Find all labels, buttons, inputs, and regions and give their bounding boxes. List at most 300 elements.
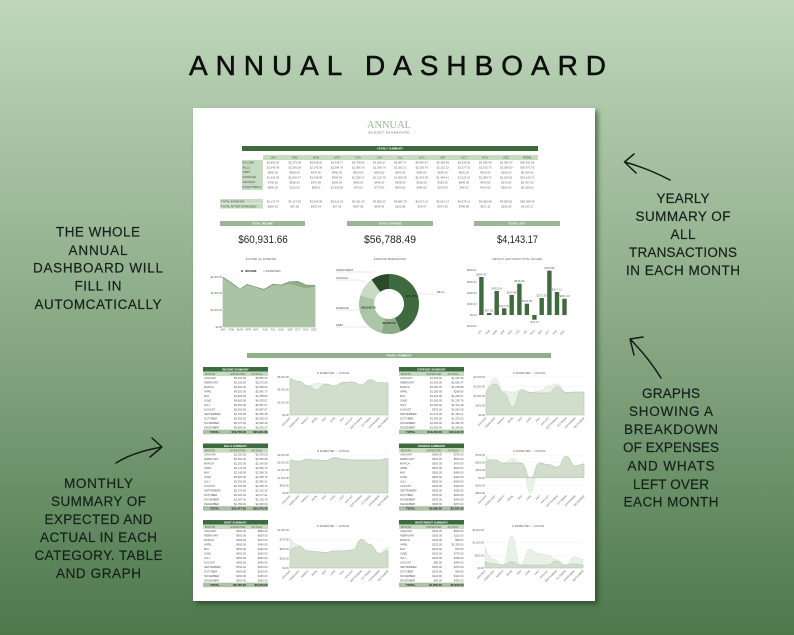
table: savings summary: $490.00 — [454, 475, 464, 479]
table: income summary: AUGUST — [204, 407, 216, 411]
table: expense summary: $1,226.39 — [452, 376, 464, 380]
table: investment summary: DECEMBER — [400, 578, 415, 582]
yearly summary table: $26,473.76 — [520, 166, 535, 170]
yearly summary table: $480.00 — [353, 180, 364, 184]
yearly summary table: AUG — [419, 156, 425, 160]
table: expense summary: $570.00 — [432, 407, 443, 411]
yearly summary table: EXPENSE — [242, 175, 256, 179]
yearly summary table: DEBT — [242, 170, 250, 174]
yearly summary table: $5,787.00 — [521, 180, 534, 184]
chart: debt expected vs actual: $750.00 — [280, 538, 290, 542]
table: expense summary: $299.83 — [454, 390, 464, 394]
chart: amount left from total income: FEB — [484, 329, 491, 335]
table: investment summary: OCTOBER — [400, 569, 413, 573]
arrow: to yearly summary — [624, 154, 670, 180]
table: expense summary: APRIL — [400, 390, 408, 394]
yearly summary table: JUL — [398, 156, 403, 160]
chart: income vs expense: SEP — [287, 328, 293, 332]
yearly summary table: $15,140.72 — [520, 176, 535, 180]
chart: amount left from total income: NOV — [551, 329, 558, 336]
KPI: total left: $4,143.17 — [497, 234, 538, 246]
yearly summary table: INVESTMENT — [242, 185, 261, 189]
table: bills summary: $2,384.76 — [256, 466, 268, 470]
table: investment summary: $110.00 — [454, 534, 464, 538]
chart: amount left from total income: $400.00 — [467, 291, 477, 295]
table: savings summary: $430.00 — [432, 497, 443, 501]
callout: yearly summary — [626, 191, 740, 278]
table: income summary: $5,450.00 — [234, 416, 246, 420]
table: income summary: $4,255.07 — [256, 398, 268, 402]
callout: whole dashboard fills in: ANNUAL — [68, 243, 128, 258]
table: savings summary: FEBRUARY — [400, 457, 415, 461]
chart: expense breakdown donut: EXPENSE BREAKDOWN — [374, 257, 406, 261]
chart: amount left from total income: $417.11 — [552, 288, 562, 292]
table: savings summary: $500.00 — [432, 479, 443, 483]
table: investment summary: $420.00 — [454, 574, 464, 578]
chart: expense expected vs actual — [473, 371, 586, 430]
yearly summary table: $1,043.28 — [415, 176, 428, 180]
table: expense summary: $1,826.47 — [452, 381, 464, 385]
yearly summary table: $560.00 — [501, 170, 512, 174]
table: bills summary: APRIL — [204, 466, 212, 470]
table: income summary: OCTOBER — [204, 416, 217, 420]
table: income summary: $60,931.66 — [253, 430, 268, 434]
chart: amount left from total income: $202.88 — [522, 299, 532, 303]
yearly summary table: $5,855.00 — [267, 161, 280, 165]
chart: expense breakdown donut: BILLS — [437, 290, 445, 294]
table: savings summary: $500.00 — [432, 466, 443, 470]
table: investment summary: $100.00 — [432, 551, 443, 555]
callout: yearly summary: ALL — [670, 227, 696, 242]
table: debt summary: $460.00 — [258, 560, 268, 564]
table: bills summary — [203, 444, 268, 511]
table: bills summary: FEBRUARY — [204, 457, 219, 461]
yearly summary table: $475.00 — [311, 170, 321, 174]
chart: amount left from total income: $545.94 — [514, 279, 525, 283]
table: investment summary: FEBRUARY — [400, 534, 415, 538]
table: bills summary: $2,200.00 — [234, 479, 246, 483]
yearly summary table: SEP — [440, 156, 446, 160]
yearly summary table: $2,298.76 — [373, 166, 386, 170]
table: bills summary: $2,280.00 — [256, 502, 268, 506]
table: bills summary: AUGUST — [204, 484, 216, 488]
table: debt summary: $520.00 — [258, 569, 268, 573]
KPI: total expense — [347, 221, 433, 246]
yearly summary table: $420.00 — [417, 180, 427, 184]
table: debt summary: $420.00 — [258, 551, 268, 555]
yearly summary table: $372.35 — [438, 204, 448, 208]
table: debt summary: $440.00 — [258, 543, 268, 547]
yearly summary table: $2,368.76 — [352, 166, 365, 170]
yearly summary table: $1,130.76 — [373, 176, 386, 180]
yearly summary table: OCT — [461, 156, 467, 160]
table: savings summary: $360.00 — [432, 488, 443, 492]
table: bills summary: $2,097.00 — [234, 497, 246, 501]
yearly summary table: MAR — [313, 156, 319, 160]
table: bills summary: $2,250.76 — [256, 484, 268, 488]
chart: income vs expense — [210, 257, 317, 332]
yearly summary table: $420.00 — [374, 170, 385, 174]
chart: income vs expense: MAR — [237, 328, 243, 332]
yearly summary table: YEARLY SUMMARY — [377, 146, 403, 150]
table: expense summary: $1,208.27 — [452, 394, 464, 398]
chart: investment expected vs actual: $0.00 — [478, 566, 485, 570]
table: debt summary: $485.00 — [236, 560, 247, 564]
chart: savings expected vs actual: -$500.00 — [475, 491, 486, 495]
table: debt summary: $450.00 — [258, 574, 268, 578]
yearly summary table: $850.00 — [268, 170, 278, 174]
arrow: to monthly tables — [116, 438, 162, 463]
chart: income vs expense: OCT — [295, 328, 301, 332]
table: income summary: $5,070.00 — [234, 421, 246, 425]
chart: savings expected vs actual — [475, 449, 586, 508]
table: expense summary: EXPENSE SUMMARY — [417, 368, 446, 372]
table: bills summary: $2,382.21 — [256, 479, 268, 483]
yearly summary table: $5,092.37 — [500, 161, 513, 165]
yearly summary table: $770.00 — [374, 186, 385, 190]
table: income summary: JANUARY — [204, 376, 217, 380]
table: debt summary: OCTOBER — [204, 569, 217, 573]
yearly summary table: $1,206.81 — [500, 176, 513, 180]
table: expense summary: FEBRUARY — [400, 381, 415, 385]
table: expense summary: $1,043.28 — [452, 407, 464, 411]
yearly summary table: $2,132.32 — [436, 166, 449, 170]
table: savings summary: JUNE — [400, 475, 407, 479]
chart: debt expected vs actual: $0.00 — [282, 566, 290, 570]
chart: income vs expense: EXPENSES — [266, 269, 281, 273]
chart: income vs expense: MAY — [253, 328, 259, 332]
table: savings summary: $750.00 — [454, 453, 464, 457]
sheet heading: ANNUAL — [367, 120, 411, 131]
chart: amount left from total income: OCT — [544, 329, 551, 336]
table: expense summary: NOVEMBER — [400, 421, 415, 425]
table: debt summary: JULY — [204, 556, 211, 560]
yearly summary table: $5,047.14 — [415, 199, 428, 203]
table: investment summary: $5,350.00 — [451, 583, 464, 587]
table: savings summary: $480.00 — [432, 502, 443, 506]
callout: monthly summary: MONTHLY — [64, 476, 133, 491]
table: income summary: TOTAL — [210, 430, 220, 434]
table: expense summary: $1,090.00 — [430, 381, 442, 385]
table: debt summary: NOVEMBER — [204, 574, 219, 578]
yearly summary table: $350.00 — [501, 186, 512, 190]
table: investment summary: $370.00 — [454, 565, 464, 569]
table: investment summary: APRIL — [400, 543, 408, 547]
table: expense summary: $1,028.88 — [452, 385, 464, 389]
yearly summary table: $5,350.00 — [521, 186, 534, 190]
chart: expense breakdown donut: $6,250.00 — [383, 321, 396, 325]
chart: amount left from total income: $97.55 — [485, 308, 494, 312]
table: expense summary: $1,090.00 — [430, 385, 442, 389]
table: debt summary: APRIL — [204, 543, 212, 547]
table: investment summary: TOTAL — [406, 583, 416, 587]
table: income summary: $5,050.00 — [234, 407, 246, 411]
table: income summary: $5,080.00 — [234, 425, 246, 429]
table: debt summary: FEBRUARY — [204, 534, 219, 538]
table: bills summary: $2,300.00 — [234, 493, 246, 497]
table: investment summary: $770.00 — [454, 551, 464, 555]
chart: income vs expense: JUN — [262, 328, 268, 332]
table: expense summary: $1,494.41 — [452, 412, 464, 416]
chart: investment expected vs actual: $1,000.00 — [472, 541, 485, 545]
table: savings summary: AUGUST — [400, 484, 412, 488]
table: investment summary: INVESTMENT SUMMARY — [415, 520, 448, 524]
table: savings summary — [399, 444, 464, 511]
table: bills summary: JANUARY — [204, 453, 217, 457]
table: debt summary: $450.00 — [236, 556, 247, 560]
yearly summary table: $408.00 — [395, 180, 406, 184]
table: debt summary: MARCH — [204, 538, 214, 542]
table: bills summary: MAY — [204, 470, 210, 474]
chart: income vs expense: DEC — [311, 328, 317, 332]
callout: graphs breakdown: GRAPHS — [642, 386, 700, 401]
yearly summary table: $4,143.17 — [521, 204, 534, 208]
yearly summary table: INCOME — [242, 160, 254, 164]
yearly summary table: $470.00 — [311, 180, 321, 184]
table: savings summary: $600.00 — [454, 466, 464, 470]
table: expense summary: $13,040.00 — [428, 430, 442, 434]
callout: graphs breakdown: OF EXPENSES — [623, 440, 719, 455]
table: savings summary: $420.00 — [454, 484, 464, 488]
chart: expense breakdown donut: DEBT — [336, 323, 344, 327]
table: expense summary: $1,090.00 — [430, 403, 442, 407]
table: debt summary: $6,250.00 — [255, 583, 268, 587]
table: debt summary: TOTAL — [210, 583, 220, 587]
table: income summary: FEBRUARY — [204, 381, 219, 385]
callout: graphs breakdown: EACH MONTH — [624, 494, 718, 510]
table: bills summary: $26,477.00 — [232, 506, 246, 510]
table: investment summary: $220.00 — [432, 543, 443, 547]
table: savings summary: SEPTEMBER — [400, 488, 417, 492]
table: expense summary: $1,470.00 — [430, 412, 442, 416]
table: investment summary: $80.00 — [434, 578, 442, 582]
callout: yearly summary: SUMMARY OF — [636, 209, 730, 224]
table: income summary: $5,090.48 — [256, 421, 268, 425]
table: savings summary: $408.00 — [454, 479, 464, 483]
chart: amount left from total income: DEC — [559, 329, 566, 336]
table: debt summary: MAY — [204, 547, 210, 551]
table: investment summary: $75.00 — [455, 547, 464, 551]
table: bills summary: TOTAL — [210, 506, 220, 510]
chart: debt expected vs actual: $1,000.00 — [277, 528, 290, 532]
table: savings summary: NOVEMBER — [400, 497, 415, 501]
table: debt summary: $645.00 — [258, 565, 268, 569]
yearly summary table: $1,208.27 — [352, 176, 365, 180]
callout: yearly summary: TRANSACTIONS — [629, 245, 737, 260]
table: income summary: $4,628.00 — [256, 385, 268, 389]
yearly summary table: $645.00 — [438, 170, 448, 174]
chart: income vs expense: INCOME VS. EXPENSE — [246, 257, 276, 261]
table: bills summary: $2,368.76 — [256, 470, 268, 474]
chart: income vs expense: $0.00 — [216, 325, 223, 329]
chart: amount left from total income: $127.36 — [499, 304, 509, 308]
table: debt summary: $450.00 — [236, 543, 247, 547]
yearly summary table: $5,014.13 — [436, 199, 449, 203]
yearly summary table: $600.00 — [332, 180, 342, 184]
table: bills summary: $2,170.00 — [234, 488, 246, 492]
table: debt summary: $500.00 — [258, 556, 268, 560]
table: expense summary: MAY — [400, 394, 406, 398]
table: debt summary: $450.00 — [236, 538, 247, 542]
yearly summary table: $307.85 — [353, 204, 364, 208]
table: debt summary: SEPTEMBER — [204, 565, 221, 569]
chart: amount left from total income: $780.88 — [544, 266, 555, 270]
callout: graphs breakdown: BREAKDOWN — [624, 422, 718, 437]
yearly summary table: $60,931.66 — [520, 161, 535, 165]
chart: expense expected vs actual: $500.00 — [476, 404, 486, 408]
table: expense summary: DECEMBER — [400, 425, 415, 429]
table: income summary: NOVEMBER — [204, 421, 219, 425]
table: debt summary — [203, 520, 268, 587]
callout: monthly summary — [34, 476, 162, 581]
table: expense summary: $1,090.00 — [430, 416, 442, 420]
chart: income vs expense: NOV — [303, 328, 309, 332]
table: expense summary: $1,223.02 — [452, 416, 464, 420]
table: expense summary: $1,340.00 — [430, 394, 442, 398]
table: income summary: APRIL — [204, 390, 212, 394]
table: investment summary: SEPTEMBER — [400, 565, 417, 569]
yearly summary table: $423.04 — [311, 204, 321, 208]
table: bills summary: $2,150.00 — [234, 484, 246, 488]
yearly summary table: $5,355.00 — [458, 161, 471, 165]
yearly summary table: TOTAL AFTER EXPENSES — [221, 204, 257, 208]
chart: investment expected vs actual: $500.00 — [475, 553, 485, 557]
chart: income vs expense: $4,000.00 — [210, 291, 223, 295]
table: bills summary: $26,473.76 — [253, 506, 268, 510]
callout: whole dashboard fills in — [33, 224, 163, 312]
yearly summary table: $2,384.76 — [331, 166, 344, 170]
table: expense summary: TOTAL — [406, 430, 416, 434]
yearly summary table: $6,250.00 — [521, 170, 534, 174]
yearly summary table: JAN — [270, 156, 276, 160]
callout: yearly summary: IN EACH MONTH — [626, 263, 740, 278]
table: bills summary: $2,170.00 — [234, 466, 246, 470]
table: income summary: SEPTEMBER — [204, 412, 221, 416]
table: investment summary: NOVEMBER — [400, 574, 415, 578]
chart: savings expected vs actual: $250.00 — [476, 468, 486, 472]
table: savings summary: JANUARY — [400, 453, 413, 457]
table: investment summary: JULY — [400, 556, 407, 560]
chart: income vs expense: INCOME — [245, 269, 257, 273]
chart: income vs expense: JUL — [271, 328, 276, 332]
table: income summary: $5,087.67 — [256, 403, 268, 407]
chart: income expected vs actual: $2,000.00 — [277, 400, 290, 404]
table: expense summary: $1,130.76 — [452, 398, 464, 402]
yearly summary table: $440.00 — [480, 180, 491, 184]
chart: income expected vs actual — [277, 371, 390, 430]
KPI: total expense: $56,788.49 — [364, 234, 416, 246]
table: bills summary: BILLS SUMMARY — [224, 444, 247, 448]
table: debt summary: AUGUST — [204, 560, 216, 564]
table: savings summary: $500.00 — [454, 457, 464, 461]
table: income summary: $4,600.00 — [234, 398, 246, 402]
yearly summary table: $5,542.77 — [331, 161, 344, 165]
chart: income vs expense: $2,000.00 — [210, 308, 223, 312]
sheet heading: BUDGET DASHBOARD — [368, 130, 410, 134]
table: investment summary: $80.00 — [434, 560, 442, 564]
table: investment summary: $100.00 — [432, 556, 443, 560]
table: expense summary: $1,090.00 — [430, 398, 442, 402]
table: investment summary: MARCH — [400, 538, 410, 542]
callout: graphs breakdown: LEFT OVER — [633, 477, 709, 492]
table: expense summary: JUNE — [400, 398, 407, 402]
yearly summary table: TOTAL EXPENSE — [221, 199, 244, 203]
yearly summary table: BILLS — [242, 165, 250, 169]
yearly summary table: $420.00 — [353, 170, 364, 174]
chart: bills expected vs actual: $2,000.00 — [277, 468, 290, 472]
arrow: to graphs — [630, 337, 661, 378]
yearly summary table: $450.00 — [480, 170, 491, 174]
yearly summary table: $3,956.52 — [373, 199, 386, 203]
chart: amount left from total income: MAR — [491, 329, 498, 336]
chart: amount left from total income: $0.00 — [470, 313, 477, 317]
table: bills summary: $2,250.00 — [234, 502, 246, 506]
yearly summary table: $1,223.02 — [458, 176, 471, 180]
table: savings summary: SAVINGS SUMMARY — [418, 444, 445, 448]
table: debt summary: $475.00 — [258, 538, 268, 542]
table: investment summary: $250.00 — [432, 565, 443, 569]
callout: whole dashboard fills in: AUTOMCATICALLY — [34, 297, 162, 312]
yearly summary table: NOV — [482, 156, 488, 160]
table: investment summary: $430.00 — [454, 556, 464, 560]
chart: bills expected vs actual: $2,500.00 — [277, 461, 290, 465]
title: ANNUAL DASHBOARD — [189, 50, 606, 81]
table: income summary: MARCH — [204, 385, 214, 389]
table: income summary: $4,758.80 — [256, 394, 268, 398]
table: savings summary: $370.00 — [454, 502, 464, 506]
yearly summary table: $5,275.08 — [288, 161, 301, 165]
yearly summary table: $2,143.08 — [310, 166, 323, 170]
chart: investment expected vs actual: $1,500.00 — [472, 528, 485, 532]
table: debt summary: $420.00 — [258, 547, 268, 551]
chart: income expected vs actual: $0.00 — [282, 413, 290, 417]
table: income summary: $5,350.48 — [256, 412, 268, 416]
chart: bills expected vs actual: $0.00 — [282, 491, 290, 495]
table: income summary: $4,000.00 — [234, 390, 246, 394]
table: bills summary: SEPTEMBER — [204, 488, 221, 492]
table: savings summary: $350.00 — [454, 488, 464, 492]
KPI: total income: TOTAL INCOME — [252, 222, 273, 226]
table: bills summary: $2,600.00 — [234, 475, 246, 479]
table: debt summary: $650.00 — [236, 569, 247, 573]
chart: bills expected vs actual: $500.00 — [280, 483, 290, 487]
yearly summary table: $1,226.39 — [267, 176, 280, 180]
callout: monthly summary: CATEGORY. TABLE — [34, 548, 162, 563]
table: expense summary: $1,090.00 — [430, 376, 442, 380]
callout: monthly summary: EXPECTED AND — [44, 512, 153, 527]
table: bills summary: $2,500.00 — [234, 457, 246, 461]
table: savings summary: $640.00 — [454, 493, 464, 497]
table: debt summary: JUNE — [204, 551, 211, 555]
yearly summary table: $56,788.49 — [520, 199, 535, 203]
table: income summary: $5,050.00 — [234, 403, 246, 407]
table: investment summary: MAY — [400, 547, 406, 551]
yearly summary table: $440.00 — [332, 170, 342, 174]
table: bills summary: $2,298.76 — [256, 475, 268, 479]
yearly summary table: $2,565.08 — [288, 166, 301, 170]
yearly summary table: $2,643.08 — [267, 166, 280, 170]
yearly summary table: $1,826.47 — [288, 176, 301, 180]
table: income summary: $5,092.37 — [256, 425, 268, 429]
yearly summary table: $4,255.07 — [373, 161, 386, 165]
chart: savings expected vs actual: $500.00 — [476, 461, 486, 465]
yearly summary table: $370.00 — [501, 180, 512, 184]
table: debt summary: $560.00 — [258, 578, 268, 582]
yearly summary table: $2,280.00 — [500, 166, 513, 170]
table: expense summary: $1,090.00 — [430, 425, 442, 429]
yearly summary table: -$79.47 — [417, 204, 427, 208]
table: income summary: $4,700.00 — [234, 412, 246, 416]
